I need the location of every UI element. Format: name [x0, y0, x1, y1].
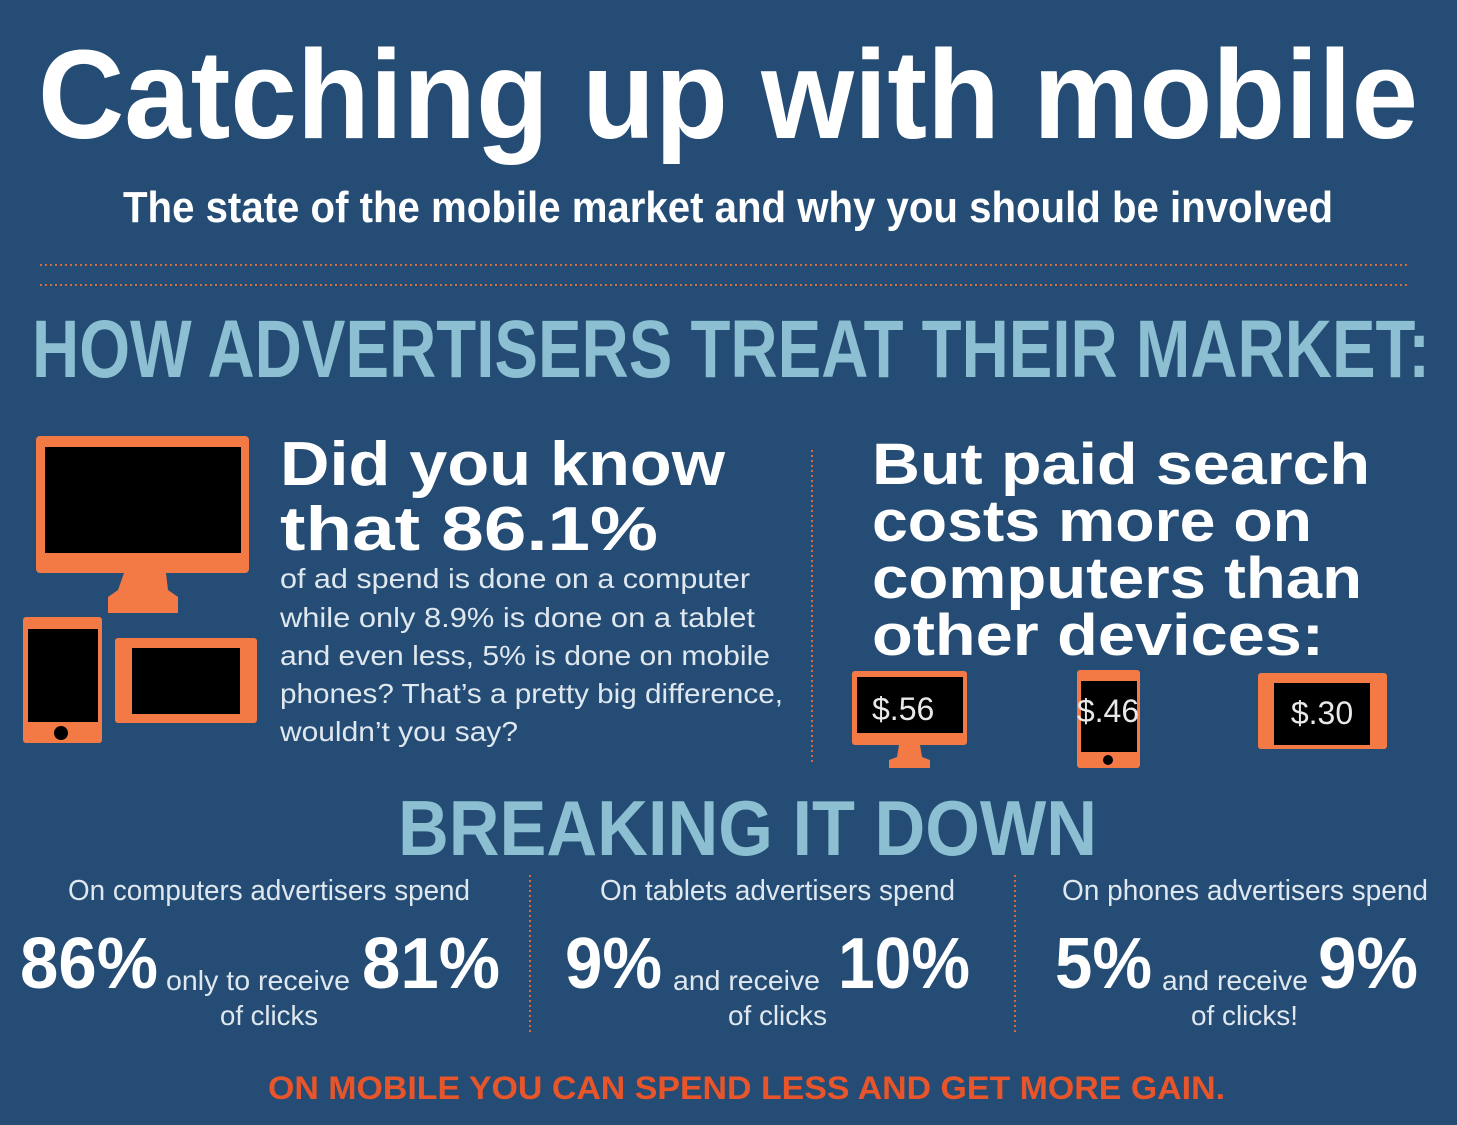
heading: paid search costs: costs more on — [872, 489, 1312, 554]
callout: conclusion: ON MOBILE YOU CAN SPEND LESS AND GET MORE GAIN. — [268, 1070, 1225, 1106]
stat: tablets: 9% — [565, 924, 662, 1004]
stat: phones: of clicks! — [1191, 1000, 1298, 1031]
icon: tablet price — [1258, 673, 1387, 749]
icon: devices group — [23, 436, 257, 743]
text block: ad spend: and even less, 5% is done on mobile — [280, 640, 770, 671]
text block: ad spend: phones? That’s a pretty big difference, — [280, 678, 783, 709]
stat: phones: On phones advertisers spend — [1062, 875, 1428, 907]
title: Catching up with mobile — [38, 24, 1418, 165]
stat: phones: and receive — [1162, 965, 1308, 996]
icon: computer price: $.56 — [872, 691, 934, 727]
stat: computers: only to receive — [166, 965, 350, 996]
text block: ad spend: of ad spend is done on a computer — [280, 563, 750, 594]
stat: tablets: and receive — [673, 965, 820, 996]
stat: tablets — [565, 875, 970, 1031]
stat: tablets: On tablets advertisers spend — [600, 875, 955, 907]
subtitle: The state of the mobile market and why you should be involved — [123, 183, 1333, 232]
stat: computers: On computers advertisers spend — [68, 875, 470, 907]
stat: computers — [20, 875, 500, 1031]
heading: did you know — [280, 430, 726, 564]
text block: ad spend: while only 8.9% is done on a tablet — [279, 602, 755, 633]
stat: computers: 86% — [20, 924, 158, 1004]
heading: did you know: that 86.1% — [280, 495, 658, 564]
stat: computers: 81% — [362, 924, 500, 1004]
stat: tablets: of clicks — [728, 1000, 827, 1031]
icon: tablet price: $.30 — [1291, 695, 1353, 731]
heading: did you know: Did you know — [280, 430, 726, 499]
heading: paid search costs: computers than — [872, 546, 1362, 611]
text block: ad spend — [279, 563, 783, 747]
icon: computer price — [852, 671, 967, 768]
icon: phone price — [1077, 670, 1140, 768]
icon: phone price: $.46 — [1077, 693, 1139, 729]
stat: phones: 5% — [1055, 924, 1152, 1004]
heading: paid search costs: other devices: — [872, 603, 1324, 668]
stat: phones — [1055, 875, 1428, 1031]
text block: ad spend: wouldn’t you say? — [279, 716, 518, 747]
stat: tablets: 10% — [838, 924, 970, 1004]
stat: computers: of clicks — [220, 1000, 318, 1031]
section heading: breaking it down: BREAKING IT DOWN — [398, 784, 1097, 872]
heading: paid search costs — [872, 432, 1370, 668]
stat: phones: 9% — [1318, 924, 1418, 1004]
heading: paid search costs: But paid search — [872, 432, 1370, 497]
